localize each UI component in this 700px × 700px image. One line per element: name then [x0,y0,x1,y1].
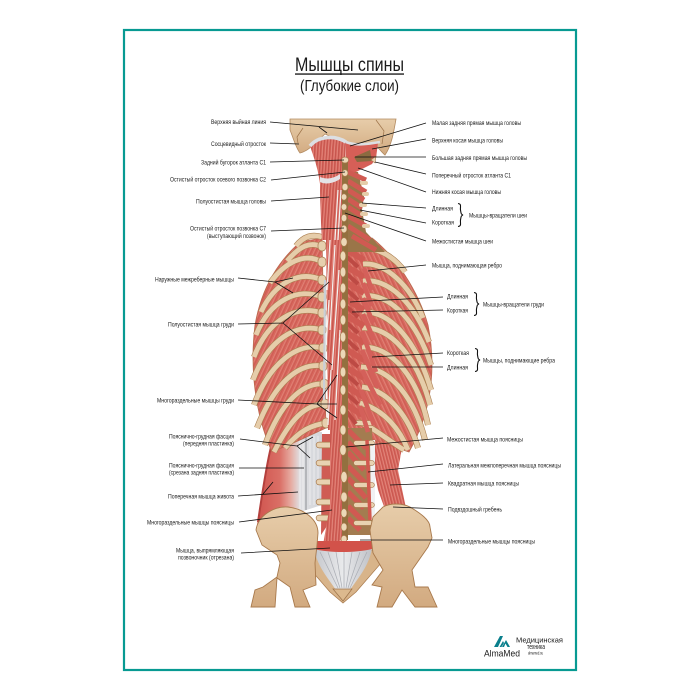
suboccipital and neck muscles right [346,142,385,252]
semispinalis thoracis muscle [324,236,343,430]
labels right: Мышцы-вращатели груди [483,302,544,308]
labels right: Длинная [432,206,453,212]
labels left: Наружные межреберные мышцы [155,276,234,284]
labels left: Пояснично-грудная фасция [169,462,234,470]
sacrum and coccyx [304,547,382,603]
labels right: Малая задняя прямая мышца головы [432,120,521,127]
labels right: Квадратная мышца поясницы [448,480,519,488]
labels right: Многораздельные мышцы поясницы [448,538,535,546]
title [295,54,404,95]
labels right: Межостистая мышца шеи [432,238,493,246]
labels left: (передняя пластинка) [183,440,234,448]
labels left: Остистый отросток осевого позвонка С2 [170,176,266,184]
left iliac and femur bones [251,507,318,607]
labels right: Короткая [447,308,468,314]
labels right: Длинная [447,364,468,372]
labels left: Многораздельные мышцы поясницы [147,520,234,526]
logo icon [494,636,510,647]
labels left [147,118,266,562]
left ribs [253,236,326,452]
labels right: Короткая [432,220,454,226]
labels right: Нижняя косая мышца головы [432,189,501,196]
spinal column [335,157,349,543]
labels right [432,120,561,546]
leader lines [238,122,443,553]
right iliac and femur bones [370,504,437,607]
labels left: Полуостистая мышца груди [168,322,234,328]
labels left: (выступающий позвонок) [207,232,266,240]
anatomy illustration [251,119,437,607]
labels left: Верхняя выйная линия [211,118,266,126]
labels right: Мышцы, поднимающие ребра [483,356,555,364]
sacral muscle band [314,541,372,552]
rotatores and levatores muscles [347,238,380,432]
labels left: Сосцевидный отросток [211,140,266,148]
labels right: Межостистая мышца поясницы [447,436,523,444]
labels left: Поперечная мышца живота [168,494,234,500]
labels left: позвоночник (отрезана) [178,554,234,562]
logo: техника [527,642,545,651]
page frame [124,30,576,670]
labels right: Мышца, поднимающая ребро [432,262,502,270]
labels left: Задний бугорок атланта С1 [201,158,266,166]
right ribs [358,248,431,450]
logo: almamed.su [528,650,543,656]
labels right: Поперечный отросток атланта С1 [432,172,511,180]
labels left: Многораздельные мышцы груди [157,398,234,404]
labels right: Длинная [447,294,468,300]
semispinalis capitis muscle [310,137,346,240]
logo [484,636,563,658]
labels left: Остистый отросток позвонка С7 [190,224,266,232]
labels right: Мышцы-вращатели шеи [469,212,527,220]
skull base [290,119,396,155]
erector spinae lumbar muscle [323,428,343,545]
labels left: Полуостистая мышца головы [196,198,266,206]
title: Мышцы спины [295,54,404,76]
labels right: Латеральная межпоперечная мышца поясницы [448,462,561,470]
labels left: Пояснично-грудная фасция [169,434,234,440]
labels right: Короткая [447,350,469,357]
lumbar deep muscles right [346,423,375,535]
logo: Медицинская [516,636,563,644]
logo: AlmaMed [484,648,520,658]
brackets [458,204,480,372]
left rib heads [318,241,330,428]
lumbar transverse processes left [319,434,331,535]
title: (Глубокие слои) [300,78,399,95]
labels right: Верхняя косая мышца головы [432,138,503,144]
quadratus lumborum muscle [368,438,406,512]
labels left: Мышца, выпрямляющая [176,548,234,554]
right intercostal muscles [345,238,432,452]
labels right: Большая задняя прямая мышца головы [432,155,527,162]
labels left: (срезана задняя пластинка) [169,470,234,476]
left intercostal muscles [253,238,326,452]
abdominal wall and lumbar fascia [257,430,322,525]
labels right: Подвздошный гребень [448,506,502,514]
